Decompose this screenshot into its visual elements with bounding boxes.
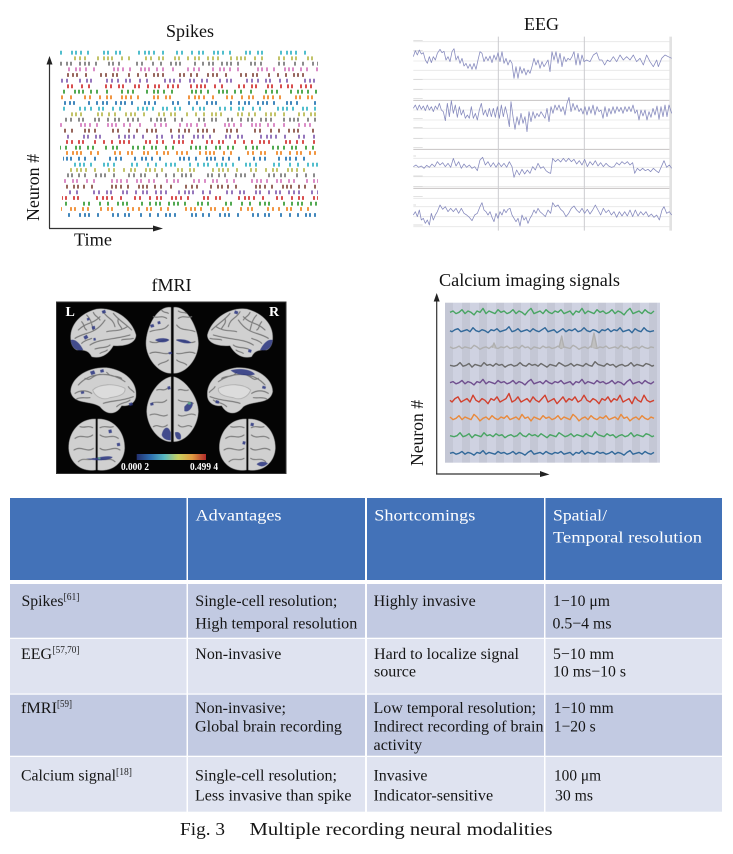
resolution: EEG	[553, 646, 626, 681]
header: Spatial/Temporal resolution: Temporal resolution	[553, 530, 702, 547]
table row: EEG	[10, 639, 722, 694]
resolution: Calcium signal	[554, 768, 602, 805]
shortcomings: fMRI: Indirect recording of brain	[374, 719, 544, 736]
label: R: R	[269, 305, 280, 320]
brain: left lateral	[71, 309, 136, 357]
shortcomings: EEG: source	[374, 664, 416, 681]
heading: EEG: EEG	[524, 14, 559, 34]
advantages: fMRI: Non-invasive;	[195, 700, 286, 717]
row label: EEG: [57,70]	[52, 645, 80, 656]
arrow: neuron axis	[48, 62, 50, 228]
arrow: time axis	[436, 473, 542, 475]
colour bar	[137, 454, 206, 460]
row label: Spikes: [61]	[64, 592, 80, 603]
table row: Calcium signal	[10, 757, 722, 812]
brain: left back	[69, 419, 125, 470]
EEG trace 1	[413, 49, 672, 78]
brain: left medial	[71, 368, 136, 413]
resolution: Spikes	[552, 593, 612, 633]
colour bar maximum: 0.499 4	[190, 462, 218, 473]
header: Spatial/Temporal resolution	[553, 508, 702, 547]
colour bar minimum: 0.000 2	[121, 462, 149, 473]
chart: spike raster rows	[59, 53, 318, 215]
table row: fMRI	[10, 695, 722, 756]
brain: right medial	[207, 368, 273, 413]
header: Advantages: Advantages	[196, 508, 282, 525]
brain: bottom view	[147, 377, 198, 442]
brain views	[69, 307, 275, 470]
header: Shortcomings: Shortcomings	[374, 508, 475, 525]
row label: Calcium signal: [18]	[116, 767, 132, 778]
brain: right lateral	[207, 309, 273, 357]
resolution: fMRI: 1−20 s	[554, 719, 596, 736]
row label: Calcium signal: Calcium signal	[21, 768, 117, 785]
EEG trace 3	[413, 157, 672, 177]
EEG trace 2	[413, 97, 672, 132]
resolution: Spikes: 1−10 μm	[553, 593, 611, 610]
arrow: time axis	[49, 228, 155, 230]
arrowhead: neuron axis	[46, 56, 52, 64]
resolution: EEG: 10 ms−10 s	[553, 664, 626, 681]
advantages: Calcium signal	[195, 768, 352, 805]
shortcomings: Calcium signal: Invasive	[374, 768, 428, 785]
panel: calcium imaging signals	[407, 270, 660, 477]
row label: EEG	[21, 645, 80, 663]
axis label: Neuron #: Neuron #	[23, 154, 43, 221]
arrowhead: neuron axis	[434, 293, 440, 302]
table header row	[10, 498, 722, 580]
EEG trace 4	[413, 203, 672, 226]
resolution: fMRI: 1−10 mm	[554, 700, 614, 717]
shortcomings: EEG	[374, 646, 520, 681]
brain: right back	[219, 419, 275, 470]
row label: fMRI: [59]	[57, 699, 72, 710]
shortcomings: fMRI	[374, 700, 544, 754]
axis label: Neuron #: Neuron #	[407, 400, 427, 466]
shortcomings: fMRI: Low temporal resolution;	[374, 700, 536, 717]
shortcomings: Calcium signal: Indicator-sensitive	[374, 788, 493, 805]
row label: fMRI: fMRI	[21, 700, 57, 717]
heading: Spikes: Spikes	[166, 21, 214, 41]
striped plot background	[445, 303, 660, 463]
row label: EEG: EEG	[21, 646, 52, 663]
panel: EEG traces	[413, 14, 672, 231]
advantages: fMRI: Global brain recording	[195, 719, 342, 736]
row label: Spikes	[22, 592, 80, 610]
resolution: Calcium signal: 100 μm	[554, 768, 602, 785]
arrowhead: time axis	[540, 471, 550, 477]
caption: figure 3: Fig. 3	[180, 819, 225, 839]
resolution: fMRI	[554, 700, 614, 736]
shortcomings: EEG: Hard to localize signal	[374, 646, 520, 663]
advantages: Calcium signal: Single-cell resolution;	[195, 768, 337, 785]
heading: Calcium imaging signals: Calcium imaging signals	[439, 270, 620, 290]
advantages: fMRI	[195, 700, 342, 736]
row label: fMRI	[21, 699, 72, 717]
table: modalities comparison	[10, 498, 722, 812]
arrowhead: time axis	[153, 226, 163, 232]
advantages: Spikes	[195, 593, 357, 633]
caption: figure 3: Multiple recording neural modalities	[250, 819, 552, 839]
resolution: Spikes: 0.5−4 ms	[552, 616, 612, 633]
heading: fMRI: fMRI	[152, 275, 192, 295]
resolution: EEG: 5−10 mm	[553, 646, 615, 663]
axis label: Time: Time	[74, 230, 112, 250]
shortcomings: fMRI: activity	[374, 737, 422, 754]
table row: Spikes	[10, 584, 722, 638]
label: L: L	[66, 305, 75, 320]
advantages: Spikes: High temporal resolution	[195, 616, 357, 633]
brain: top view	[146, 307, 198, 373]
row label: Spikes: Spikes	[22, 593, 64, 610]
header: Spatial/Temporal resolution: Spatial/	[553, 508, 608, 525]
arrow: neuron axis	[436, 298, 438, 474]
panel: fMRI brain maps	[56, 275, 286, 474]
advantages: Calcium signal: Less invasive than spike	[195, 788, 352, 805]
chart: EEG plot	[413, 37, 672, 231]
chart: calcium traces	[450, 308, 654, 455]
black image panel	[56, 302, 286, 474]
shortcomings: Calcium signal	[374, 768, 493, 805]
advantages: Spikes: Single-cell resolution;	[195, 593, 337, 610]
resolution: Calcium signal: 30 ms	[555, 788, 593, 805]
shortcomings: Spikes: Highly invasive	[374, 593, 476, 610]
advantages: EEG: Non-invasive	[195, 646, 281, 663]
panel: spikes raster	[23, 21, 318, 250]
